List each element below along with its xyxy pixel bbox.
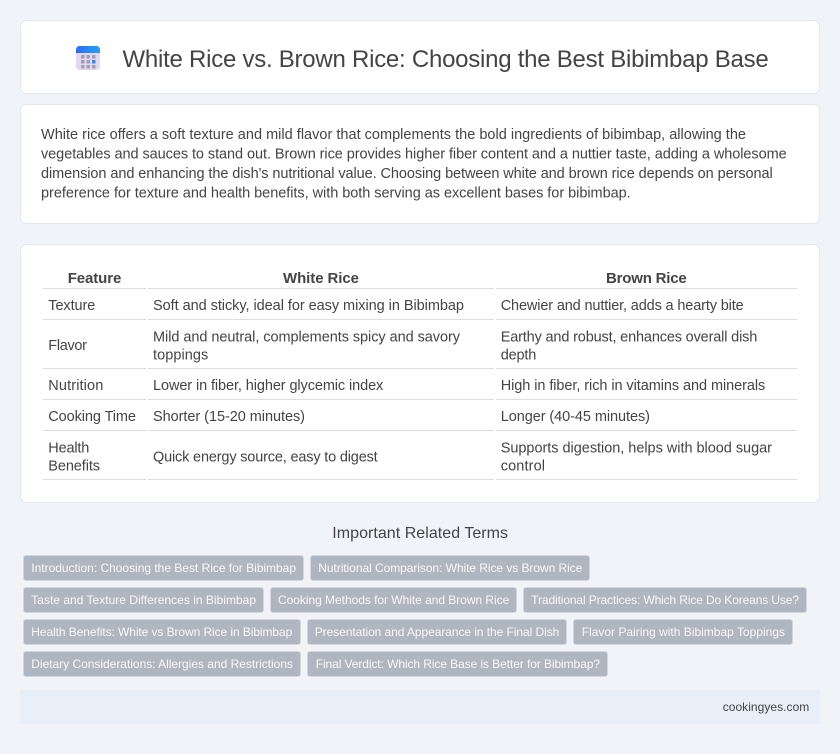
table row: flavor: depth: [501, 347, 536, 363]
table row: health benefits: Supports digestion, helps with blood sugar: [501, 440, 772, 456]
icon: calendar: [76, 46, 100, 70]
tag: Presentation and Appearance in the Final Dish: [315, 625, 559, 639]
tag: Taste and Texture Differences in Bibimbap: [31, 593, 256, 607]
table row: cooking time: Cooking Time: [48, 409, 136, 425]
table row: health benefits: Benefits: [48, 458, 100, 474]
panel: introduction: [20, 104, 820, 224]
tag: [24, 652, 300, 676]
tag: Cooking Methods for White and Brown Rice: [278, 593, 510, 607]
tag: Health Benefits: White vs Brown Rice in Bibimbap: [31, 625, 293, 639]
tag: [270, 588, 516, 612]
title: White Rice vs. Brown Rice: Choosing the Best Bibimbap Base: [122, 46, 769, 73]
table row: cooking time: Longer (40-45 minutes): [501, 409, 650, 425]
table header row: White Rice: [283, 270, 359, 287]
text block: introduction paragraph: dimension and enhancing the dish's nutritional value. Choosing between white and brown rice depends on personal: [41, 166, 773, 182]
table row: nutrition: Nutrition: [48, 378, 103, 394]
text block: introduction paragraph: vegetables and sauces to stand out. Brown rice provides higher fiber content and a nuttier taste, adding a wholesome: [41, 146, 787, 162]
panel: related term tags: [24, 556, 806, 676]
tag: [24, 588, 264, 612]
tag: [24, 556, 304, 580]
table row: texture: [48, 298, 744, 314]
table row: health benefits: [48, 440, 772, 474]
table row: nutrition: High in fiber, rich in vitamins and minerals: [501, 378, 765, 394]
table row: texture: Texture: [48, 298, 95, 314]
tag: [308, 652, 608, 676]
table row: health benefits: Quick energy source, easy to digest: [153, 449, 378, 465]
table row: flavor: toppings: [153, 347, 208, 363]
table row: texture: Soft and sticky, ideal for easy mixing in Bibimbap: [153, 298, 464, 314]
table row: nutrition: Lower in fiber, higher glycemic index: [153, 378, 384, 394]
table row: cooking time: [48, 409, 650, 425]
table row: flavor: Flavor: [48, 338, 87, 354]
tag: Nutritional Comparison: White Rice vs Brown Rice: [318, 561, 583, 575]
table row: texture: Chewier and nuttier, adds a hearty bite: [501, 298, 744, 314]
table row: flavor: Mild and neutral, complements spicy and savory: [153, 329, 461, 345]
tag: [524, 588, 806, 612]
tag: Final Verdict: Which Rice Base is Better for Bibimbap?: [316, 657, 600, 671]
text block: introduction paragraph: preference for texture and health benefits, with both serving as excellent bases for bibimbap.: [41, 186, 631, 202]
tag: [574, 620, 792, 644]
table row: nutrition: [48, 378, 765, 394]
tag: Introduction: Choosing the Best Rice for Bibimbap: [31, 561, 296, 575]
table header row: Brown Rice: [606, 270, 687, 287]
heading: important related terms: Important Related Terms: [332, 525, 508, 542]
tag: [308, 620, 566, 644]
table row: health benefits: control: [501, 458, 545, 474]
text block: introduction paragraph: [41, 127, 787, 202]
text block: introduction paragraph: White rice offers a soft texture and mild flavor that complements the bold ingredients of bibimbap, allowing the: [41, 127, 746, 143]
table row: health benefits: Health: [48, 440, 89, 456]
panel: comparison table: [20, 244, 820, 502]
footer: [20, 690, 820, 724]
table header row: Feature: [68, 270, 121, 287]
tag: [310, 556, 590, 580]
tag: Dietary Considerations: Allergies and Restrictions: [31, 657, 293, 671]
footer source: cookingyes.com: [723, 700, 809, 714]
tag: [24, 620, 300, 644]
table row: cooking time: Shorter (15-20 minutes): [153, 409, 305, 425]
table row: flavor: [48, 329, 757, 363]
table header row: [68, 270, 687, 287]
tag: Traditional Practices: Which Rice Do Koreans Use?: [531, 593, 799, 607]
panel: title header: [20, 20, 820, 94]
table row: flavor: Earthy and robust, enhances overall dish: [501, 329, 757, 345]
tag: Flavor Pairing with Bibimbap Toppings: [582, 625, 785, 639]
